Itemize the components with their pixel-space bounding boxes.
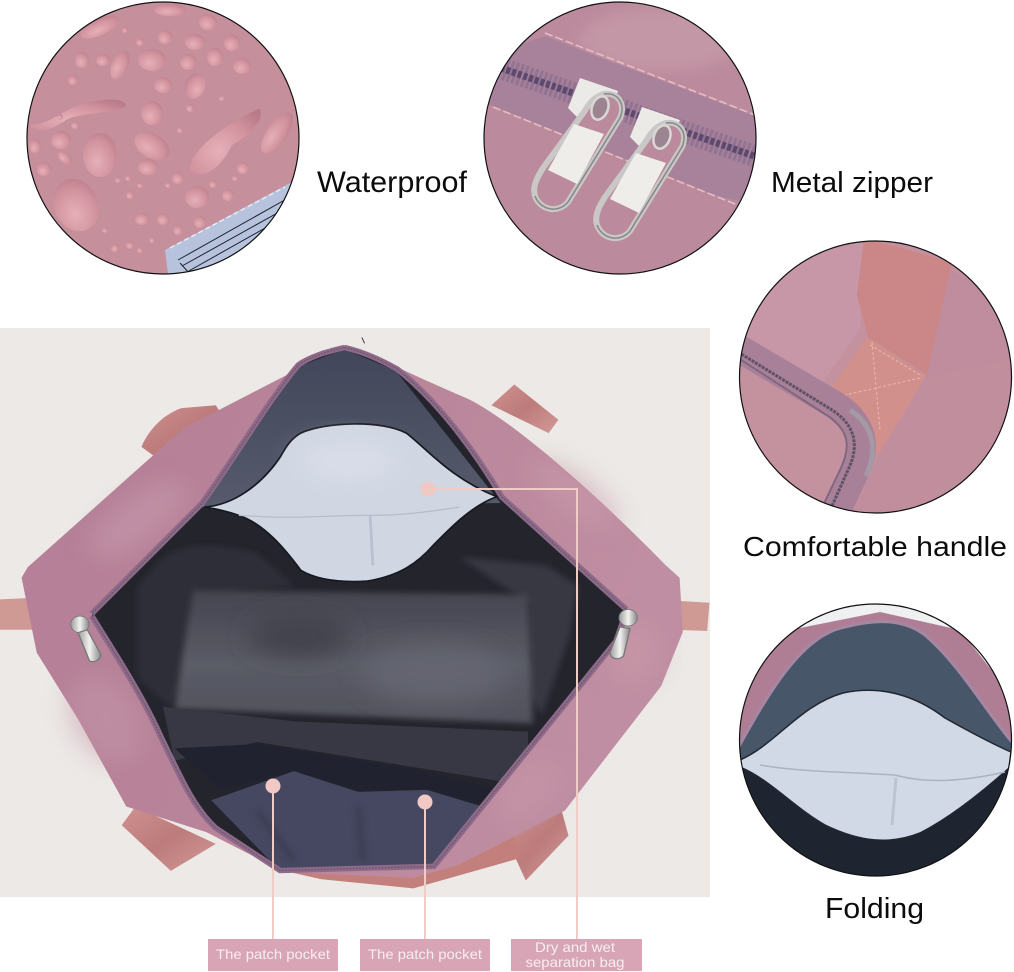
label: The patch pocket (right) <box>360 939 490 971</box>
label: The patch pocket (right): The patch pocket <box>368 946 482 962</box>
zipper pull left <box>534 78 622 209</box>
heading: Comfortable handle: Comfortable handle <box>743 531 1007 562</box>
dark bottom <box>743 770 1008 876</box>
heading: Metal zipper: Metal zipper <box>771 167 933 199</box>
main bag photo <box>0 337 709 888</box>
patch pocket <box>211 771 482 871</box>
label: The patch pocket (left): The patch pocket <box>216 946 330 962</box>
panel: waterproof detail circle <box>26 1 300 275</box>
panel: main photo background <box>0 328 710 897</box>
label: The patch pocket (left) <box>208 939 338 971</box>
droplets <box>29 4 299 253</box>
callout marker: separation bag <box>420 482 436 496</box>
floor <box>174 590 533 723</box>
panel: comfortable handle detail circle <box>735 238 1014 520</box>
callout marker: patch pocket right <box>418 794 432 810</box>
fabric highlights <box>55 448 661 832</box>
label: Dry and wet separation bag: separation bag <box>526 954 624 970</box>
left zipper slider <box>71 616 101 662</box>
zipper tape <box>488 36 760 205</box>
label: Dry and wet separation bag <box>511 939 642 971</box>
zipper tape edges <box>92 347 626 871</box>
bag handles <box>0 384 709 888</box>
heading: Waterproof: Waterproof <box>317 166 468 199</box>
right zipper slider <box>610 609 637 659</box>
slate lining <box>738 622 1012 770</box>
strap webbing <box>830 238 952 455</box>
bag interior <box>83 341 634 877</box>
side folds <box>139 548 286 702</box>
light pouch <box>740 690 1011 840</box>
panel: folding detail circle <box>735 600 1014 880</box>
blue label patch <box>165 182 291 274</box>
heading: Folding: Folding <box>825 893 924 925</box>
black speck <box>362 337 365 343</box>
zipper band <box>738 348 873 515</box>
front fold <box>163 707 528 786</box>
upper lining <box>202 349 501 507</box>
pink edge <box>740 612 1011 742</box>
label: Dry and wet separation bag: Dry and wet <box>535 939 615 955</box>
dry and wet pouch <box>204 424 497 582</box>
callout marker: patch pocket left <box>266 778 280 794</box>
bag body <box>22 345 683 878</box>
callout leader lines <box>273 489 577 939</box>
panel: metal zipper detail circle <box>480 0 760 280</box>
zipper pull right <box>596 107 684 238</box>
